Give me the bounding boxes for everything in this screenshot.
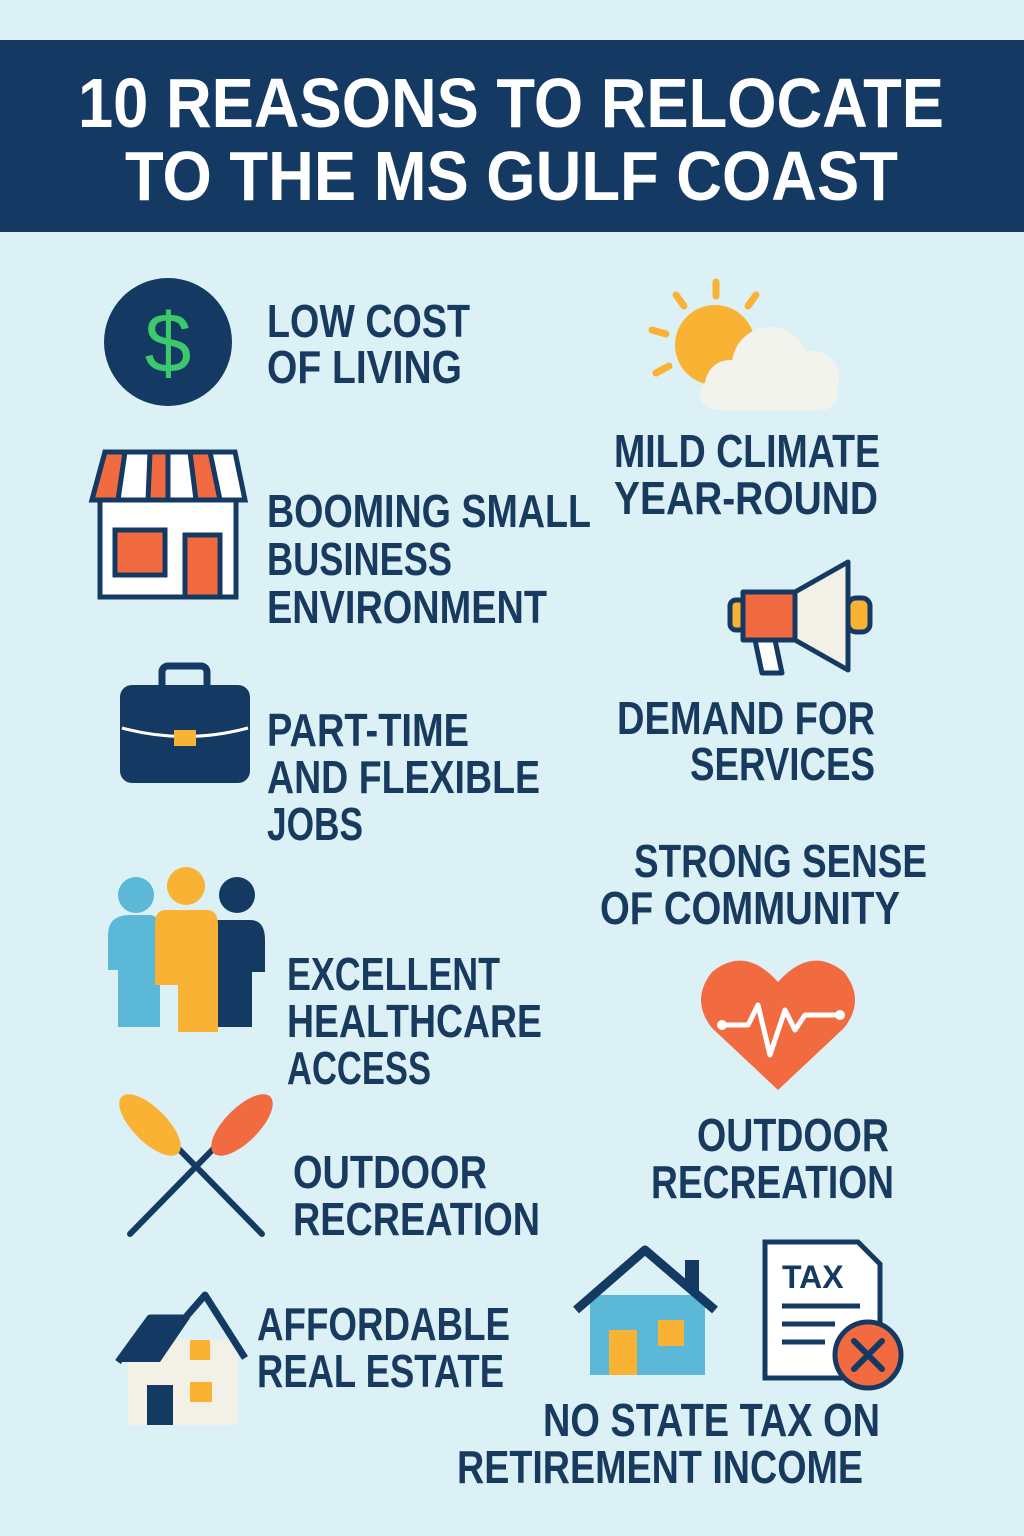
text: strong sense of community: STRONG SENSE	[634, 835, 927, 887]
text: mild climate	[614, 425, 880, 524]
text: part-time jobs: AND FLEXIBLE	[267, 751, 540, 803]
text: excellent healthcare	[287, 948, 542, 1094]
icon: house left	[118, 1295, 245, 1425]
text: demand for services: DEMAND FOR	[617, 692, 875, 744]
text: low cost of living: LOW COST	[267, 295, 470, 347]
text: no state tax: RETIREMENT INCOME	[457, 1441, 863, 1493]
icon: people	[108, 867, 265, 1032]
text: part-time jobs: JOBS	[267, 798, 363, 850]
text: booming small business: ENVIRONMENT	[267, 581, 547, 633]
text: demand for services: SERVICES	[690, 738, 875, 790]
text: mild climate: YEAR-ROUND	[614, 472, 878, 524]
icon: briefcase	[120, 666, 250, 783]
text: affordable real estate: REAL ESTATE	[257, 1345, 504, 1397]
text: outdoor recreation right	[651, 1109, 894, 1208]
text: excellent healthcare: EXCELLENT	[287, 948, 500, 1000]
text: part-time jobs	[267, 704, 540, 850]
text: no state tax: NO STATE TAX ON	[543, 1394, 880, 1446]
text: booming small business: BOOMING SMALL	[267, 485, 591, 537]
title banner: TO THE MS GULF COAST	[125, 137, 898, 215]
text: low cost of living	[267, 295, 470, 393]
text: outdoor recreation right: OUTDOOR	[697, 1109, 889, 1161]
title banner: 10 REASONS TO RELOCATE	[78, 64, 944, 142]
text: mild climate: MILD CLIMATE	[614, 425, 880, 477]
text: outdoor recreation left: RECREATION	[293, 1193, 540, 1245]
icon: store	[92, 452, 245, 597]
icon: dollar	[104, 278, 232, 406]
icon: tax document	[765, 1242, 901, 1388]
icon: sun and cloud	[652, 282, 839, 410]
text: excellent healthcare: ACCESS	[287, 1042, 431, 1094]
text: booming small business	[267, 485, 591, 633]
text: outdoor recreation left: OUTDOOR	[293, 1146, 487, 1198]
icon: heart	[701, 961, 855, 1090]
text: affordable real estate	[257, 1298, 510, 1397]
icon: megaphone	[730, 562, 870, 673]
text: no state tax	[457, 1394, 880, 1493]
text: booming small business: BUSINESS	[267, 533, 452, 585]
text: strong sense of community	[600, 835, 927, 934]
icon: paddles	[110, 1085, 282, 1234]
title banner	[0, 40, 1024, 232]
text: part-time jobs: PART-TIME	[267, 704, 469, 756]
text: excellent healthcare: HEALTHCARE	[287, 995, 542, 1047]
icon: blue house	[576, 1250, 715, 1375]
text: low cost of living: OF LIVING	[267, 341, 462, 393]
text: affordable real estate: AFFORDABLE	[257, 1298, 510, 1350]
text: strong sense of community: OF COMMUNITY	[600, 882, 900, 934]
text: demand for services	[617, 692, 875, 790]
text: outdoor recreation left	[293, 1146, 540, 1245]
icon: dollar: $	[145, 296, 191, 390]
text: outdoor recreation right: RECREATION	[651, 1156, 894, 1208]
icon: tax document: TAX	[782, 1259, 844, 1295]
